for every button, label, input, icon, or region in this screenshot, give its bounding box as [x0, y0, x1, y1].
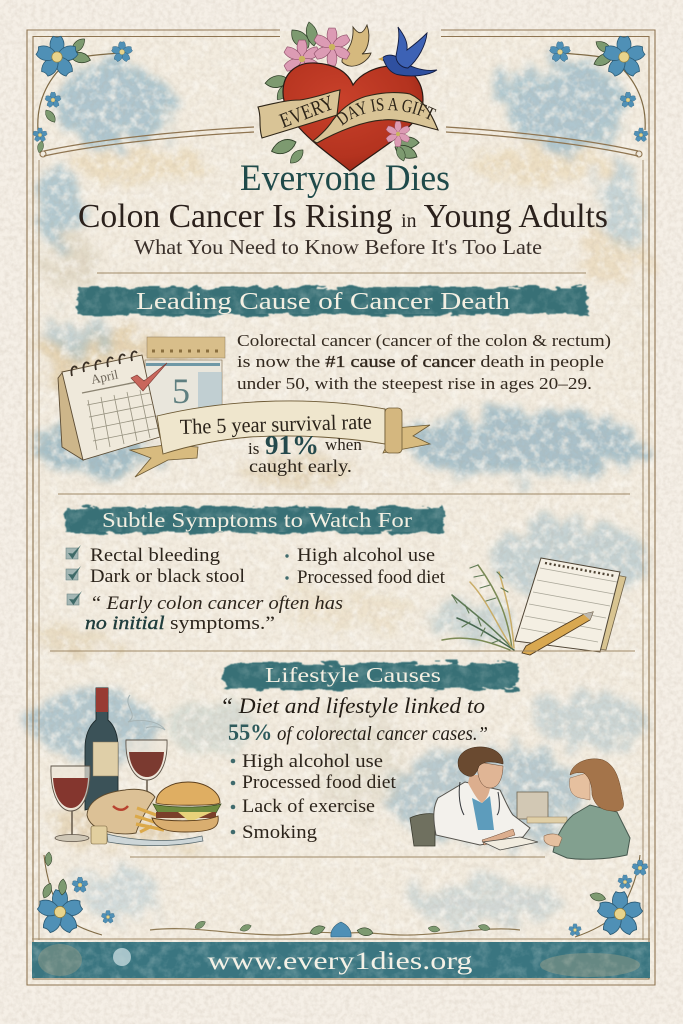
- ribbon text: The 5 year survival rate: [179, 410, 372, 439]
- survival stat: 91%: [265, 430, 319, 460]
- paragraph: Colorectal cancer (cancer of the colon & rectum): [237, 331, 611, 350]
- quote: “ Early colon cancer often has: [90, 593, 343, 614]
- banner heading: Leading Cause of Cancer Death: [136, 289, 510, 315]
- icon: april calendar: [58, 351, 167, 460]
- survival stat: when: [325, 435, 362, 454]
- corner flowers top left: [32, 36, 133, 153]
- bread chunks: [91, 826, 107, 844]
- quote: no initial symptoms.”: [85, 613, 275, 634]
- pink flowers and leaves: [265, 22, 420, 166]
- heart emblem: [257, 22, 439, 172]
- causes list: [231, 751, 397, 843]
- checklist left: Rectal bleeding: [90, 545, 221, 566]
- checklist left: Dark or black stool: [90, 566, 245, 587]
- chair: [410, 814, 435, 846]
- paragraph: under 50, with the steepest rise in ages 20–29.: [237, 374, 592, 393]
- causes list: Lack of exercise: [242, 796, 375, 817]
- paragraph: is now the #1 cause of cancer death in people: [237, 352, 604, 371]
- survival stat: is: [248, 439, 259, 458]
- footer band: [32, 942, 650, 978]
- bottom vine: [32, 920, 650, 939]
- icon: notepad: [515, 558, 626, 655]
- steam: [128, 695, 165, 730]
- ribbon right: [313, 93, 438, 143]
- checklist left: [66, 545, 245, 587]
- banner: [78, 287, 588, 315]
- causes list: High alcohol use: [242, 751, 383, 772]
- caught early text: caught early.: [249, 456, 352, 476]
- icon: april calendar: April: [90, 366, 120, 387]
- bluebird: [378, 27, 437, 76]
- banner heading: Lifestyle Causes: [265, 663, 441, 687]
- bullets right: [285, 545, 446, 588]
- headline: Colon Cancer Is Rising in Young Adults: [78, 198, 608, 235]
- section: leading cause: [58, 287, 611, 477]
- icon: grass: [442, 565, 514, 650]
- banner: [66, 507, 444, 533]
- bullets right: High alcohol use: [297, 545, 435, 566]
- bullets right: Processed food diet: [297, 567, 446, 588]
- wine glass right: [126, 740, 167, 795]
- section: symptoms: [66, 507, 626, 655]
- ribbon left: [258, 90, 340, 138]
- ribbon: survival rate: [130, 401, 430, 477]
- icon: back calendar: 5: [172, 371, 190, 411]
- ribbon text: Every: EVERY: [276, 90, 337, 133]
- banner heading: Subtle Symptoms to Watch For: [102, 508, 412, 532]
- causes list: Processed food diet: [242, 772, 397, 793]
- icon: wine and food: [51, 688, 221, 846]
- corner flowers bottom left: [36, 851, 115, 935]
- quote: [67, 591, 343, 634]
- title: Everyone Dies: [240, 158, 450, 199]
- patient: [544, 759, 630, 859]
- footer url: www.every1dies.org: [208, 946, 473, 975]
- wine bottle: [85, 688, 118, 810]
- wine glass left: [51, 766, 90, 842]
- fries: [135, 808, 164, 832]
- icon: back calendar: [145, 337, 225, 430]
- section: lifestyle: [51, 663, 630, 859]
- wrap: [87, 789, 155, 834]
- doctor: [434, 747, 538, 850]
- ribbon text: Day is a gift: DAY IS A GIFT: [335, 98, 436, 126]
- small pink flower: [385, 121, 411, 147]
- subtitle: What You Need to Know Before It's Too Late: [134, 235, 542, 259]
- banner: [224, 663, 518, 689]
- causes list: Smoking: [242, 822, 318, 843]
- corner flowers top right: [549, 36, 649, 142]
- icon: doctor and patient: [410, 747, 630, 859]
- quote stat: 55% of colorectal cancer cases.”: [228, 720, 488, 745]
- paragraph: [237, 331, 611, 393]
- desk items: [517, 792, 567, 823]
- quote: “ Diet and lifestyle linked to: [220, 693, 485, 718]
- plate and knife: [107, 834, 203, 846]
- icon: footer flower: [113, 948, 131, 966]
- burger: [152, 782, 221, 832]
- heart: [283, 63, 423, 171]
- corner flowers bottom right: [568, 855, 648, 937]
